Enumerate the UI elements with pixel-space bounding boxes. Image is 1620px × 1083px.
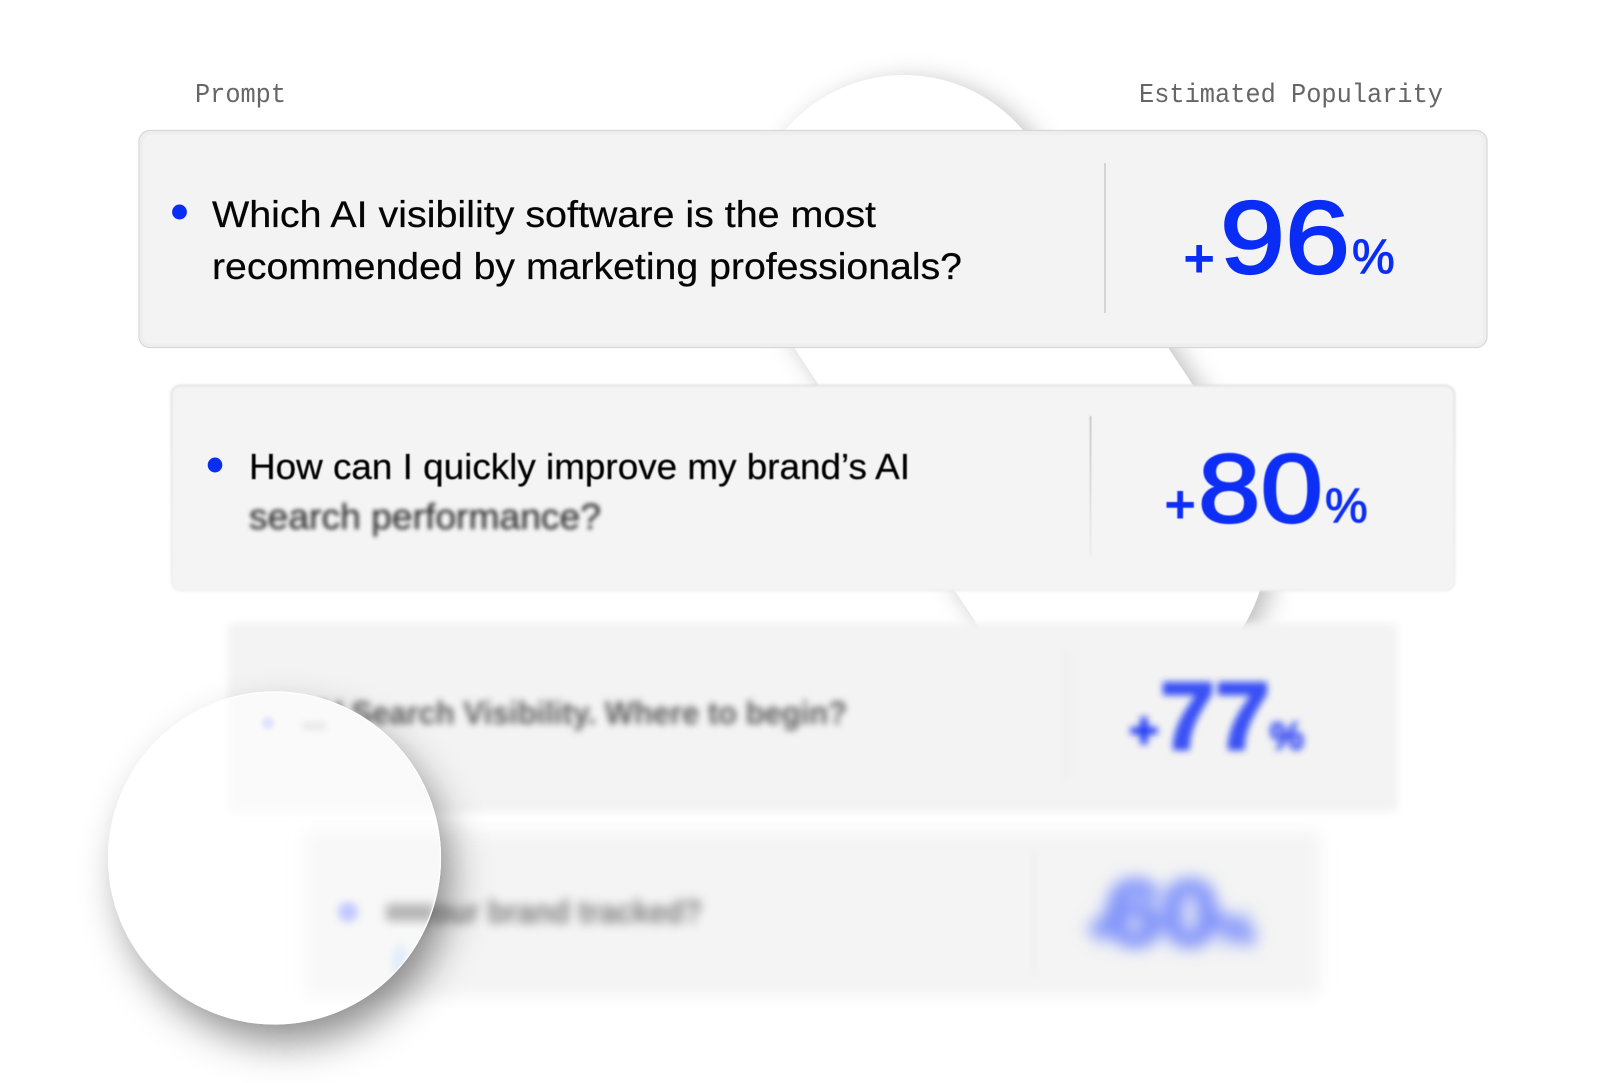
value: [1165, 434, 1368, 543]
value: 60: [1106, 864, 1218, 964]
value: [1130, 663, 1304, 770]
value: +: [1130, 705, 1158, 758]
card 2: slightly blurred prompt row: [172, 386, 1454, 590]
prompt text: Which AI visibility software is the most: [212, 193, 877, 235]
card 1: sharp top prompt row: recommended by marketing professionals?: [212, 245, 962, 287]
value: [1184, 180, 1395, 295]
value: 80: [1198, 434, 1323, 543]
faded bullet: row 4: [338, 902, 358, 922]
faded text: row 3: [304, 722, 324, 730]
bullet: [208, 458, 222, 472]
column heading: prompt: Prompt: [195, 80, 286, 110]
bullet: [172, 204, 187, 220]
value: 96: [1220, 180, 1350, 295]
value: %: [1216, 905, 1255, 954]
faded text: row 4: [386, 904, 434, 921]
prompt text: AI Search Visibility. Where to begin?: [312, 695, 847, 731]
background capsule shape with shadow: [904, 231, 1120, 549]
value: %: [1325, 480, 1368, 533]
column heading: estimated popularity: Estimated Popularity: [1139, 80, 1443, 110]
value: [1088, 864, 1255, 964]
value: +: [1088, 902, 1115, 954]
value: %: [1352, 231, 1395, 284]
value: 77: [1160, 663, 1270, 770]
faded value smudge: [391, 945, 408, 973]
prompt text: How can I quickly improve my brand’s AI: [249, 446, 910, 487]
value: +: [1184, 230, 1214, 288]
card 4: heavily blurred prompt row: [305, 831, 1320, 997]
value: %: [1270, 716, 1304, 758]
card 2: slightly blurred prompt row: search performance?: [249, 496, 601, 537]
card 3: blurred prompt row: [228, 623, 1398, 812]
prompt text: Is your brand tracked?: [382, 893, 702, 930]
faded bullet: row 3: [262, 717, 274, 729]
magnifier lens with faded content: [96, 688, 476, 1068]
value: +: [1165, 476, 1195, 534]
card 1: sharp top prompt row: [139, 130, 1487, 348]
